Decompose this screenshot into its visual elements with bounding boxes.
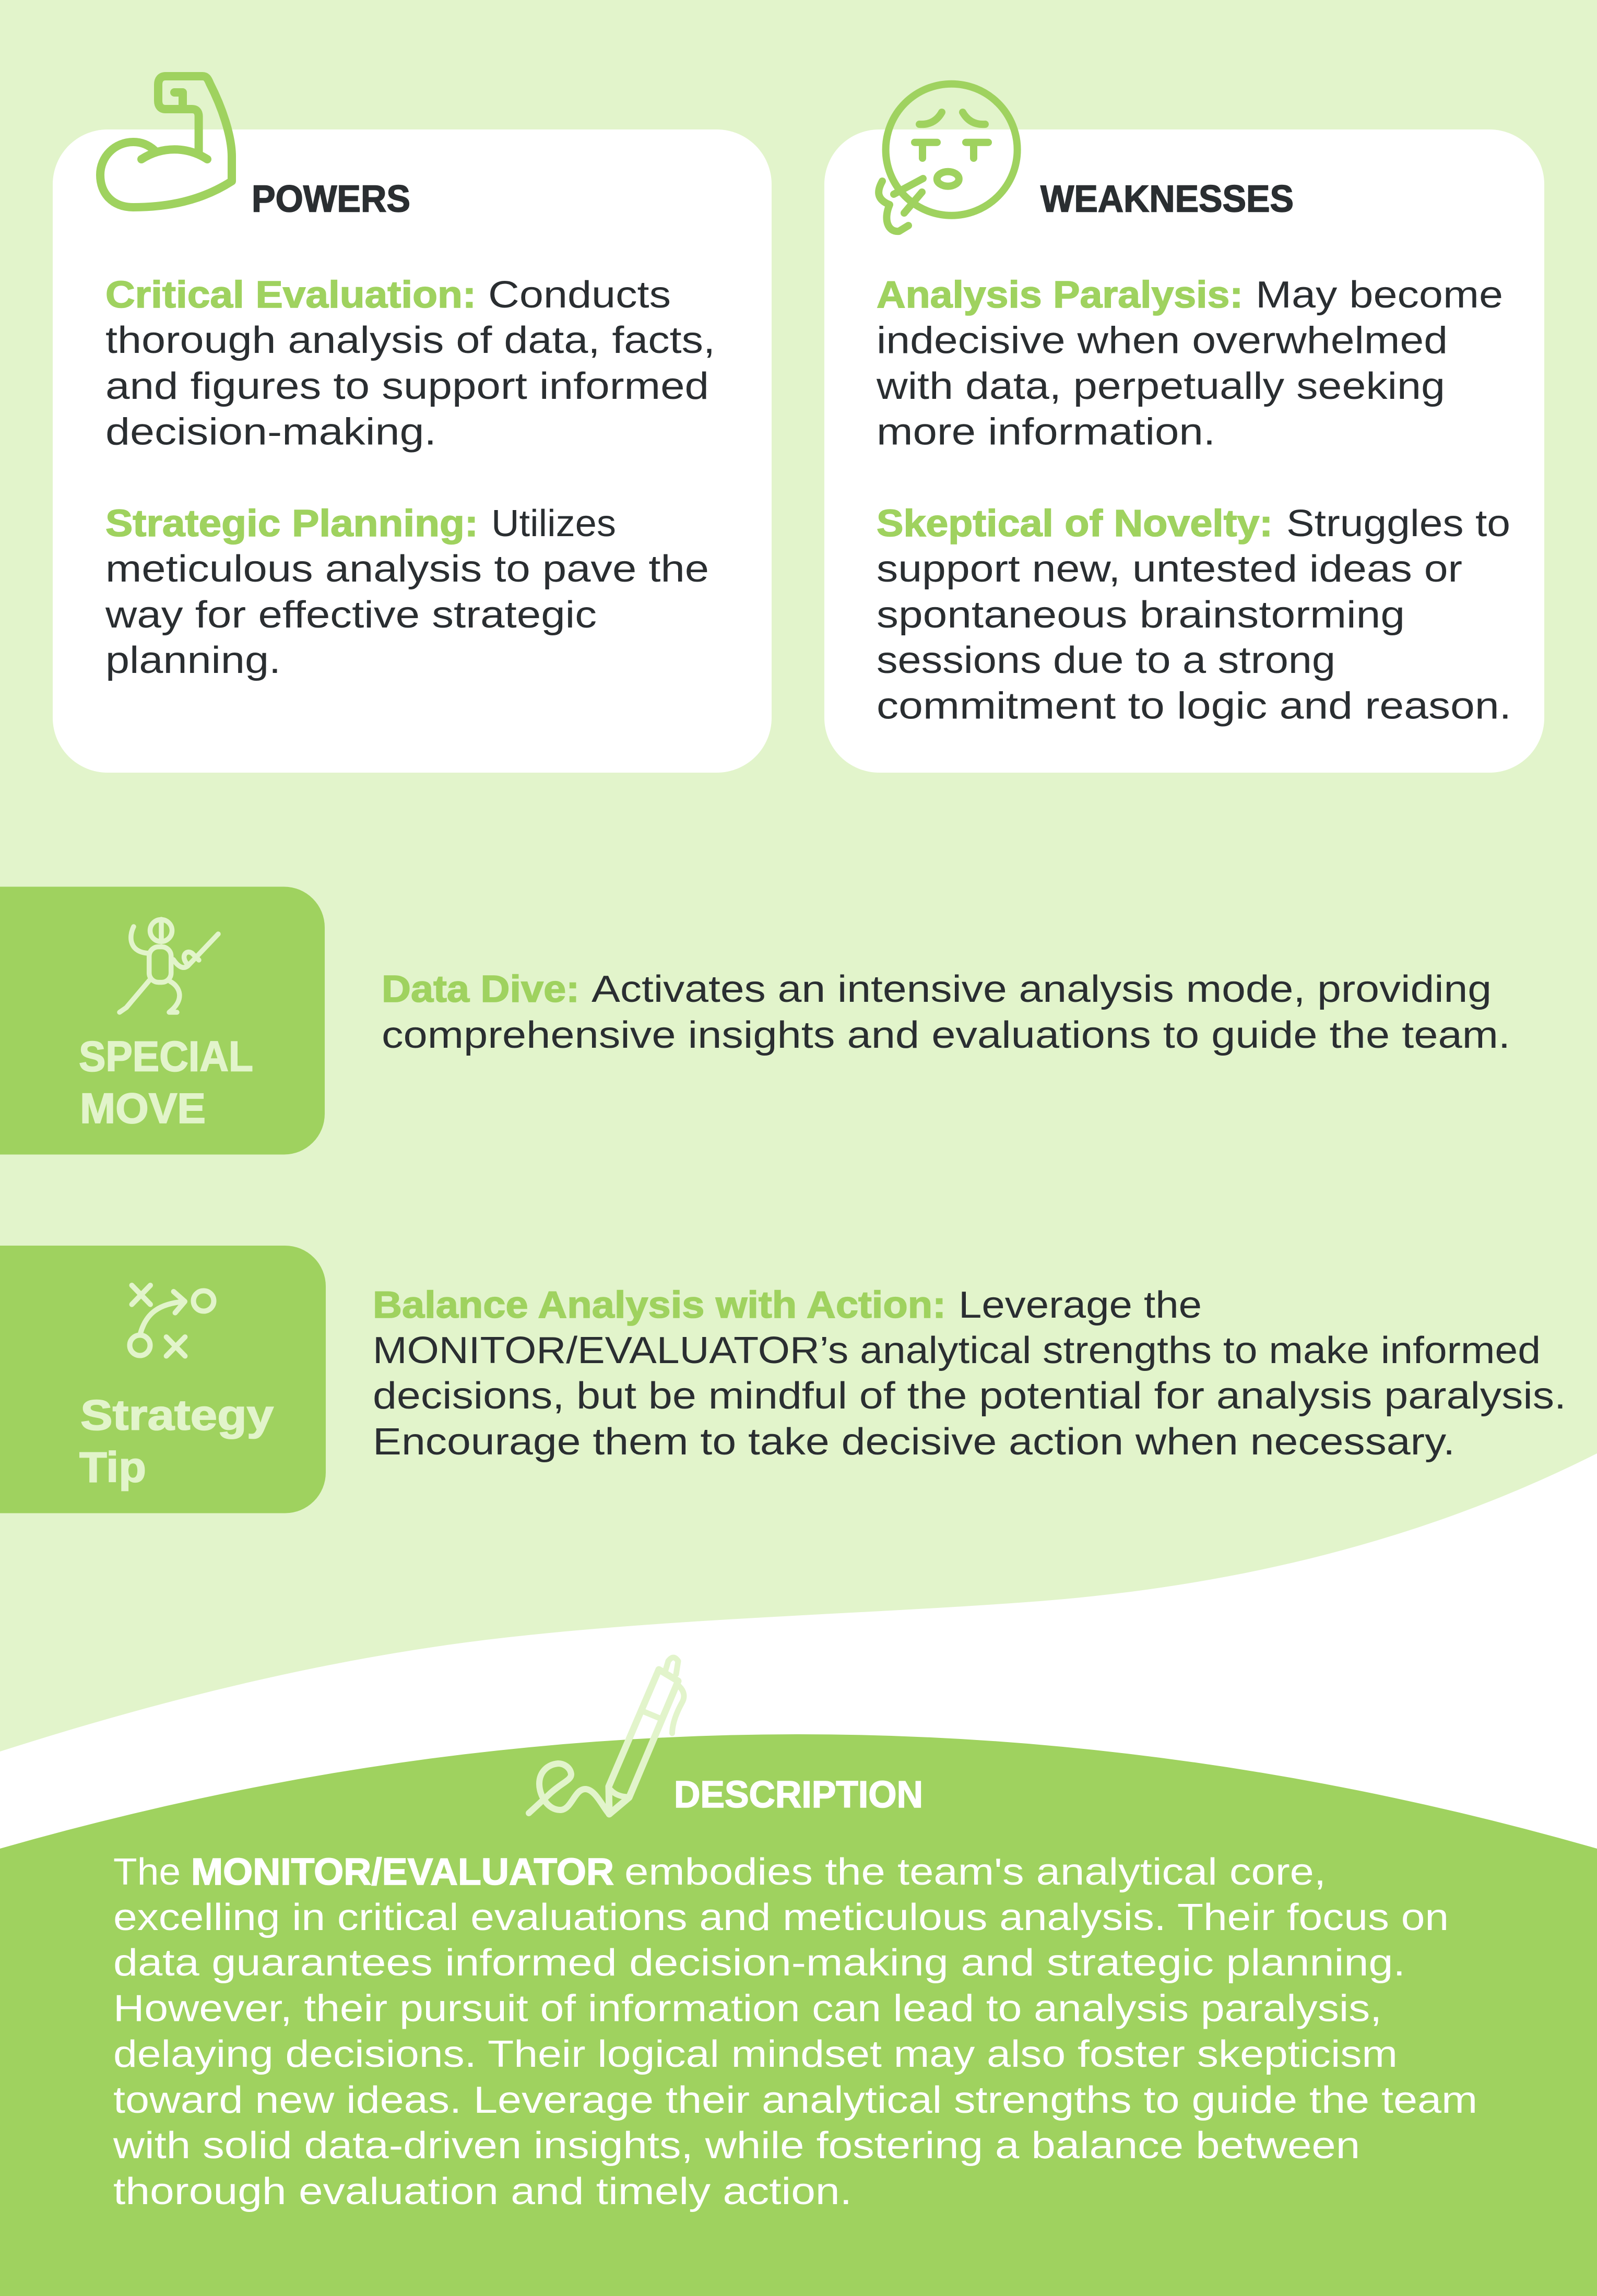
background: white wave (0, 1453, 1597, 2296)
special move tab (0, 886, 325, 1155)
weaknesses text: skeptical of novelty: Struggles to (1286, 503, 1510, 545)
panel: description (113, 1658, 1477, 2212)
description text: excelling in critical evaluations and meticulous analysis. Their focus on (113, 1897, 1449, 1938)
weaknesses card (824, 129, 1544, 773)
strategy tip text: Encourage them to take decisive action when necessary. (373, 1421, 1455, 1463)
strategy tip tab (0, 1246, 326, 1513)
weaknesses text: analysis paralysis (876, 274, 1503, 453)
icon: pen signing (529, 1658, 684, 1814)
strategy tip label (79, 1392, 274, 1491)
powers text: critical evaluation: thorough analysis of data, facts, (105, 319, 715, 361)
powers text: critical evaluation (105, 274, 715, 453)
description text: delaying decisions. Their logical mindset may also foster skepticism (113, 2033, 1398, 2075)
powers text: strategic planning (105, 503, 709, 681)
powers text: critical evaluation: Critical Evaluation: (105, 274, 476, 316)
strategy tip label: Strategy (80, 1392, 274, 1439)
special move text: Activates an intensive analysis mode, providing (592, 968, 1492, 1010)
description text: toward new ideas. Leverage their analytical strengths to guide the team (113, 2079, 1477, 2121)
powers heading: POWERS (252, 179, 410, 220)
weaknesses text: skeptical of novelty: Skeptical of Novelty: (877, 503, 1273, 545)
powers text: strategic planning: planning. (105, 640, 281, 681)
powers text: strategic planning: meticulous analysis to pave the (105, 548, 709, 590)
strategy tip label: Tip (79, 1444, 146, 1491)
weaknesses text: skeptical of novelty: support new, untested ideas or (877, 548, 1462, 590)
weaknesses text: analysis paralysis: with data, perpetually seeking (876, 365, 1445, 407)
special move label: SPECIAL (79, 1033, 253, 1081)
panel: description background dome (0, 1734, 1597, 2296)
icon: sick face (879, 84, 1018, 231)
strategy tip text (373, 1284, 1566, 1463)
special move text: comprehensive insights and evaluations to guide the team. (382, 1014, 1510, 1056)
powers text: critical evaluation: decision-making. (105, 411, 436, 453)
panel: weaknesses (824, 84, 1544, 773)
strategy tip text: Balance Analysis with Action: (373, 1284, 946, 1326)
description text: thorough evaluation and timely action. (113, 2171, 852, 2212)
weaknesses text: analysis paralysis: indecisive when overwhelmed (877, 319, 1448, 361)
description text: However, their pursuit of information can lead to analysis paralysis, (113, 1988, 1382, 2030)
powers text: strategic planning: way for effective strategic (105, 594, 597, 636)
special move text (382, 968, 1510, 1056)
icon: flexed arm (100, 76, 232, 207)
description text: The (113, 1851, 181, 1893)
strategy tip text: Leverage the (959, 1284, 1202, 1326)
special move label: MOVE (80, 1085, 206, 1132)
icon: fencer (120, 919, 218, 1012)
powers text: strategic planning: Utilizes (491, 503, 616, 545)
special move text: Data Dive: (382, 968, 579, 1010)
description text: with solid data-driven insights, while fostering a balance between (113, 2125, 1360, 2167)
weaknesses text: skeptical of novelty (877, 503, 1511, 727)
description heading: DESCRIPTION (674, 1774, 923, 1816)
weaknesses text: analysis paralysis: May become (1256, 274, 1503, 316)
description text: data guarantees informed decision-making and strategic planning. (113, 1942, 1405, 1984)
panel: strategy tip (0, 1246, 326, 1513)
weaknesses text: analysis paralysis: Analysis Paralysis: (877, 274, 1243, 316)
powers text: strategic planning: Strategic Planning: (105, 503, 478, 545)
icon: playbook (129, 1285, 214, 1356)
weaknesses heading: WEAKNESSES (1040, 179, 1294, 220)
strategy tip text: decisions, but be mindful of the potential for analysis paralysis. (373, 1375, 1566, 1417)
weaknesses text: analysis paralysis: more information. (877, 411, 1215, 453)
description text: embodies the team's analytical core, (624, 1851, 1326, 1893)
weaknesses text: skeptical of novelty: sessions due to a strong (877, 640, 1335, 681)
description text: MONITOR/EVALUATOR (191, 1851, 614, 1893)
panel: special move (0, 886, 325, 1155)
special move label (79, 1033, 253, 1132)
description text (113, 1851, 1477, 2212)
strategy tip text: MONITOR/EVALUATOR’s analytical strengths to make informed (373, 1330, 1541, 1371)
powers card (53, 129, 772, 773)
weaknesses text: skeptical of novelty: spontaneous brainstorming (877, 594, 1405, 636)
powers text: critical evaluation: Conducts (488, 274, 671, 316)
panel: powers (53, 76, 772, 773)
powers text: critical evaluation: and figures to support informed (105, 365, 709, 407)
weaknesses text: skeptical of novelty: commitment to logic and reason. (877, 685, 1511, 727)
